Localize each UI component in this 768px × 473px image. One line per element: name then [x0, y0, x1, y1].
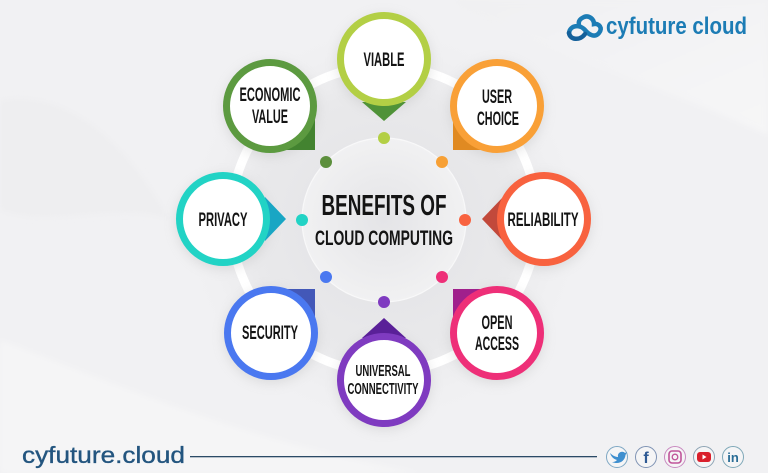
- footer line: [190, 456, 597, 457]
- title: BENEFITS OF: [322, 190, 446, 222]
- node: economic value: VALUE: [252, 107, 288, 128]
- node: user choice: USER: [482, 87, 512, 108]
- footer url: cyfuture.cloud: [22, 442, 185, 468]
- logo: [569, 13, 747, 40]
- node: viable: VIABLE: [364, 50, 404, 71]
- icon: instagram: [664, 446, 686, 468]
- node: universal connectivity: [337, 318, 431, 430]
- icon: facebook: f: [643, 450, 649, 467]
- node: economic value: [223, 62, 317, 156]
- node: privacy: PRIVACY: [198, 210, 248, 231]
- icon: youtube: [694, 446, 714, 468]
- node: economic value: ECONOMIC: [240, 85, 301, 106]
- title: CLOUD COMPUTING: [315, 227, 453, 250]
- node: viable: [337, 15, 431, 121]
- title: [315, 190, 453, 250]
- social icons: [606, 446, 744, 468]
- inner hub: [302, 138, 466, 302]
- node: security: SECURITY: [242, 323, 298, 344]
- node: open access: OPEN: [482, 313, 512, 334]
- node: open access: [450, 289, 544, 383]
- icon: cloud: [569, 16, 601, 39]
- node: reliability: [482, 175, 591, 269]
- connector dots: [296, 132, 471, 308]
- icon: twitter: [606, 446, 628, 468]
- node: open access: ACCESS: [475, 334, 519, 355]
- node: security: [224, 289, 318, 383]
- icon: linkedin: in: [727, 450, 739, 465]
- node: universal connectivity: CONNECTIVITY: [348, 381, 419, 398]
- ring connecting the benefits: [231, 66, 537, 372]
- node: reliability: RELIABILITY: [508, 210, 579, 231]
- node: privacy: [176, 175, 286, 269]
- node: universal connectivity: UNIVERSAL: [356, 363, 411, 380]
- node: user choice: CHOICE: [477, 109, 519, 130]
- node: user choice: [450, 62, 544, 156]
- logo wordmark: cyfuture cloud: [606, 13, 747, 40]
